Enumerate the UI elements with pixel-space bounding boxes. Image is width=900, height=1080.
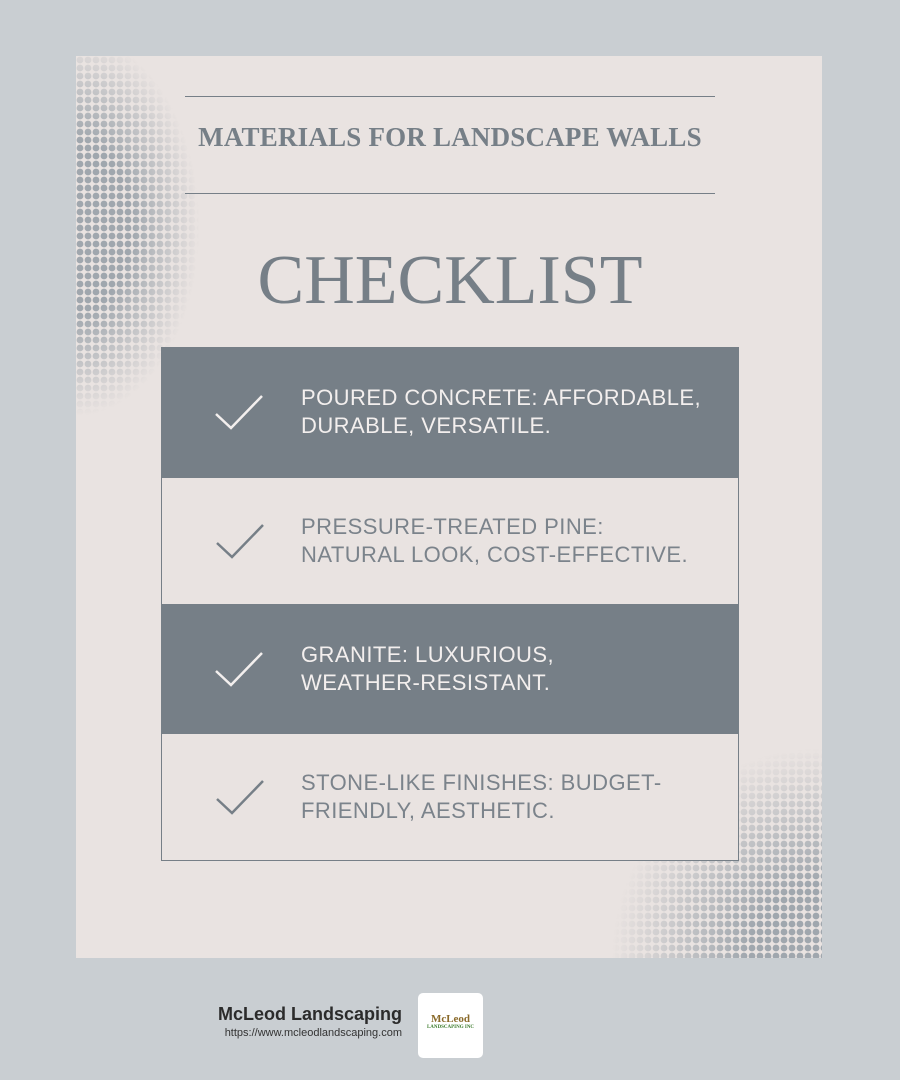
subtitle with rules <box>185 96 715 194</box>
subtitle with rules: MATERIALS FOR LANDSCAPE WALLS <box>198 122 702 152</box>
checklist item 1: POURED CONCRETE: AFFORDABLE, <box>301 385 701 410</box>
checklist item 4: FRIENDLY, AESTHETIC. <box>301 798 555 823</box>
footer brand: https://www.mcleodlandscaping.com <box>225 1027 402 1039</box>
checklist item 3 <box>161 605 739 733</box>
checklist item 1 <box>161 347 739 477</box>
icon: check <box>216 780 264 815</box>
logo: McLeod <box>431 1013 470 1025</box>
checklist item 3: WEATHER-RESISTANT. <box>301 670 550 695</box>
title: CHECKLIST <box>258 242 642 319</box>
checklist item 2: NATURAL LOOK, COST-EFFECTIVE. <box>301 542 688 567</box>
checklist item 2: PRESSURE-TREATED PINE: <box>301 514 604 539</box>
logo: LANDSCAPING INC <box>427 1025 474 1030</box>
checklist item 3: GRANITE: LUXURIOUS, <box>301 642 554 667</box>
panel: main card <box>76 56 822 958</box>
footer brand <box>218 1004 402 1039</box>
halftone decoration <box>76 56 822 958</box>
checklist item 4 <box>161 733 739 861</box>
checklist item 1: DURABLE, VERSATILE. <box>301 413 551 438</box>
icon: check <box>215 395 263 430</box>
footer brand: McLeod Landscaping <box>218 1004 402 1024</box>
icon: check <box>216 524 264 559</box>
checklist item 4: STONE-LIKE FINISHES: BUDGET- <box>301 770 662 795</box>
logo <box>418 993 483 1058</box>
icon: check <box>215 652 263 687</box>
checklist item 2 <box>161 477 739 605</box>
